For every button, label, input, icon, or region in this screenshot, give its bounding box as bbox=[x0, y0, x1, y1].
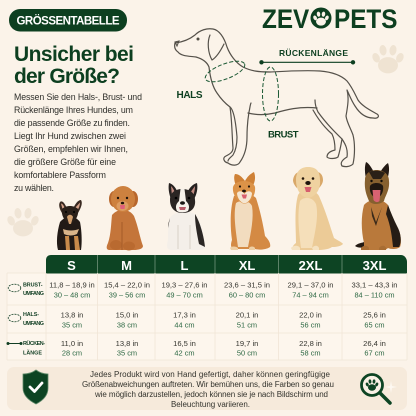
intro text block: Rückenlänge Ihres Hundes, um bbox=[14, 105, 133, 115]
table header: L bbox=[181, 258, 189, 273]
badge: Größentabelle: GRÖSSENTABELLE bbox=[16, 14, 120, 28]
row: Halsumfang: 13,8 in bbox=[61, 310, 83, 320]
intro text block: Messen Sie den Hals-, Brust- und bbox=[14, 92, 142, 102]
dog: poodle (M) bbox=[107, 186, 143, 250]
table header: M bbox=[121, 258, 132, 273]
decorative paw right bbox=[371, 45, 405, 73]
row: Rückenlänge bbox=[6, 339, 386, 358]
row: Brustumfang: 39 – 56 cm bbox=[109, 290, 145, 300]
row: Halsumfang: 44 cm bbox=[174, 320, 195, 330]
logo: Zevopets bbox=[262, 5, 397, 34]
row: Brustumfang bbox=[8, 280, 398, 300]
intro text block: Größen, empfehlen wir Ihnen, bbox=[14, 144, 128, 154]
heading bbox=[14, 43, 134, 88]
badge: Größentabelle bbox=[9, 9, 127, 32]
row: Rückenlänge: LÄNGE bbox=[23, 350, 42, 356]
row: Halsumfang: 15,0 in bbox=[116, 310, 138, 320]
footer text: Größenabweichungen auftreten. Wir bemühen uns, die Farben so genau bbox=[82, 380, 334, 389]
row: Brustumfang: 23,6 – 31,5 in bbox=[224, 280, 270, 290]
row: Rückenlänge: 42 cm bbox=[174, 348, 195, 358]
row: Brustumfang: 60 – 80 cm bbox=[229, 290, 265, 300]
icon: magnifier with paw bbox=[362, 374, 397, 403]
intro text block: die passende Größe zu finden. bbox=[14, 118, 130, 128]
row: Brustumfang: 11,8 – 18,9 in bbox=[49, 280, 95, 290]
back length line bbox=[259, 60, 355, 64]
table header: XL bbox=[239, 258, 255, 273]
row: Brustumfang: 33,1 – 43,3 in bbox=[351, 280, 398, 290]
table header: 2XL bbox=[299, 258, 322, 273]
dog: golden retriever (2XL) bbox=[291, 167, 343, 250]
row: Rückenlänge: 13,8 in bbox=[116, 339, 138, 348]
footer text: wie möglich darzustellen, jedoch können sie je nach Bildschirm und bbox=[94, 390, 328, 399]
decorative paw left bbox=[6, 208, 40, 236]
row: Brustumfang: 29,1 – 37,0 in bbox=[287, 280, 334, 290]
dog outline bbox=[175, 29, 378, 167]
logo: Zevopets: ZEV bbox=[262, 5, 309, 34]
table header: 3XL bbox=[363, 258, 386, 273]
table body bbox=[7, 273, 407, 360]
row: Rückenlänge: 35 cm bbox=[117, 348, 137, 358]
row: Rückenlänge: 67 cm bbox=[364, 348, 385, 358]
row: Rückenlänge: 28 cm bbox=[62, 348, 82, 358]
neck measuring loop bbox=[203, 57, 247, 86]
row: Rückenlänge: 11,0 in bbox=[61, 339, 83, 348]
heading: Unsicher bei bbox=[14, 43, 134, 66]
table header bbox=[46, 255, 407, 274]
intro text block bbox=[14, 92, 142, 193]
logo: Zevopets: O bbox=[312, 5, 330, 34]
row: Halsumfang: HALS- bbox=[23, 312, 39, 318]
row: Brustumfang: 74 – 94 cm bbox=[292, 290, 329, 300]
row: Halsumfang: 17,3 in bbox=[173, 310, 196, 320]
footer text: Beleuchtung variieren. bbox=[171, 400, 250, 409]
intro text block: die größere Größe für eine bbox=[14, 157, 116, 167]
row: Halsumfang: 65 cm bbox=[364, 320, 385, 330]
heading: der Größe? bbox=[14, 65, 120, 88]
row: Rückenlänge: RÜCKEN- bbox=[23, 340, 45, 347]
dog: chihuahua (S) bbox=[57, 200, 82, 250]
footer text bbox=[82, 370, 334, 409]
row: Brustumfang: UMFANG bbox=[23, 291, 44, 297]
dog: german shepherd (3XL) bbox=[355, 162, 401, 250]
row: Rückenlänge: 22,8 in bbox=[299, 339, 322, 348]
label: Hals: HALS bbox=[176, 90, 203, 101]
row: Halsumfang: 38 cm bbox=[117, 320, 137, 330]
dog eye and nose bbox=[175, 38, 200, 46]
logo: Zevopets: PETS bbox=[334, 5, 397, 34]
row: Halsumfang: 22,0 in bbox=[299, 310, 322, 320]
footer note panel bbox=[7, 367, 407, 410]
row: Rückenlänge: 58 cm bbox=[300, 348, 321, 358]
label: Brust: BRUST bbox=[268, 130, 299, 140]
dog: shiba inu (XL) bbox=[230, 172, 270, 250]
row: Halsumfang: UMFANG bbox=[23, 321, 44, 327]
row: Halsumfang: 56 cm bbox=[300, 320, 321, 330]
row: Brustumfang: 49 – 70 cm bbox=[166, 290, 203, 300]
intro text block: zu wählen. bbox=[14, 183, 54, 193]
chest measuring loop bbox=[262, 67, 278, 121]
row: Brustumfang: 15,4 – 22,0 in bbox=[104, 280, 150, 290]
row: Halsumfang bbox=[8, 310, 386, 330]
size table bbox=[6, 255, 407, 360]
intro text block: Liegt Ihr Hund zwischen zwei bbox=[14, 131, 126, 141]
dog: french bulldog (L) bbox=[167, 183, 205, 250]
row: Brustumfang: 84 – 110 cm bbox=[354, 290, 395, 300]
row: Rückenlänge: 19,7 in bbox=[236, 339, 258, 348]
row: Rückenlänge: 26,4 in bbox=[363, 339, 386, 348]
label: Rückenlänge: RÜCKENLÄNGE bbox=[279, 48, 348, 58]
row: Halsumfang: 51 cm bbox=[237, 320, 257, 330]
row: Rückenlänge: 50 cm bbox=[237, 348, 257, 358]
footer text: Jedes Produkt wird von Hand gefertigt, daher können geringfügige bbox=[90, 370, 331, 379]
row: Brustumfang: BRUST- bbox=[23, 282, 43, 288]
row: Brustumfang: 19,3 – 27,6 in bbox=[161, 280, 208, 290]
icon: shield with check bbox=[23, 370, 48, 404]
row: Halsumfang: 25,6 in bbox=[363, 310, 386, 320]
dog measurement diagram bbox=[175, 29, 378, 167]
table header: S bbox=[67, 258, 76, 273]
row: Brustumfang: 30 – 48 cm bbox=[54, 290, 90, 300]
row: Halsumfang: 20,1 in bbox=[236, 310, 258, 320]
row: Rückenlänge: 16,5 in bbox=[173, 339, 196, 348]
row: Halsumfang: 35 cm bbox=[62, 320, 82, 330]
intro text block: komfortablere Passform bbox=[14, 170, 106, 180]
